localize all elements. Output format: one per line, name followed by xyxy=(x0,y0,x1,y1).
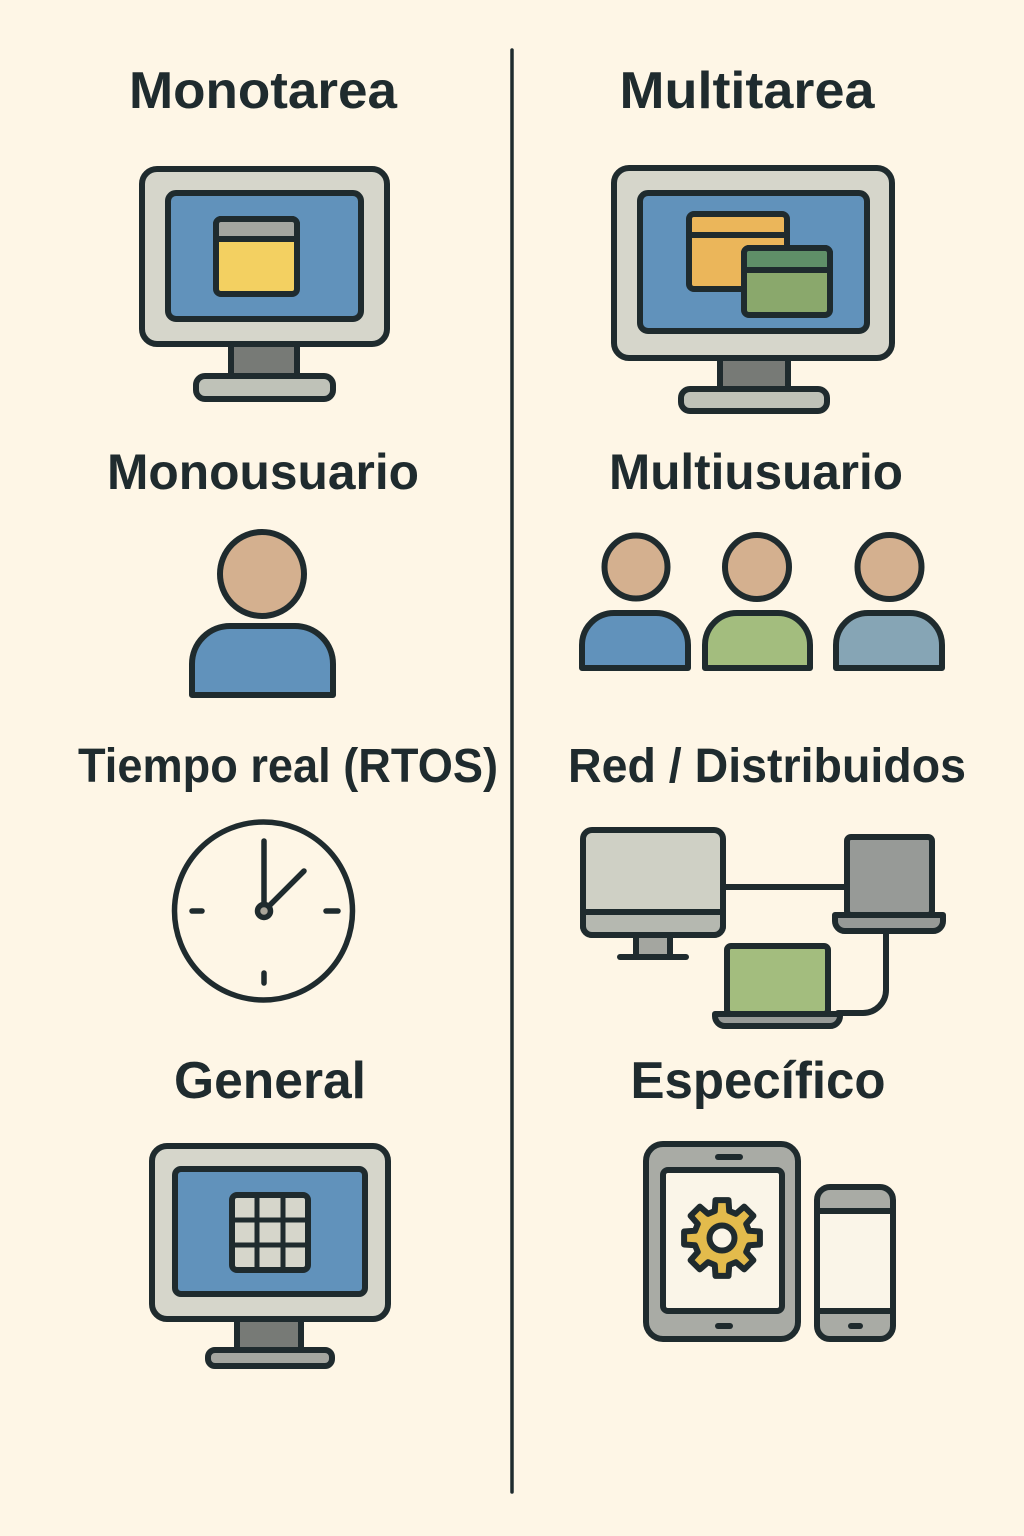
heading: General: General xyxy=(174,1052,366,1110)
heading: Monousuario: Monousuario xyxy=(107,444,419,500)
icon: three users xyxy=(582,535,942,668)
icon: single window monitor xyxy=(142,169,387,399)
center divider xyxy=(510,50,514,1492)
heading: Monotarea: Monotarea xyxy=(129,62,398,120)
icon: gear xyxy=(684,1200,760,1276)
icon: monitor with grid xyxy=(152,1146,388,1366)
heading: Red / Distribuidos: Red / Distribuidos xyxy=(568,740,966,793)
heading: Multiusuario: Multiusuario xyxy=(609,444,903,500)
heading: Tiempo real (RTOS): Tiempo real (RTOS) xyxy=(78,740,498,793)
heading: Multitarea: Multitarea xyxy=(620,62,876,120)
icon: single user xyxy=(192,532,333,695)
heading: Específico: Específico xyxy=(630,1052,886,1110)
icon: tablet and phone with gear xyxy=(646,1144,893,1339)
icon: multiple windows monitor xyxy=(614,168,892,411)
icon: distributed network xyxy=(583,830,943,1026)
icon: clock xyxy=(174,822,352,1000)
